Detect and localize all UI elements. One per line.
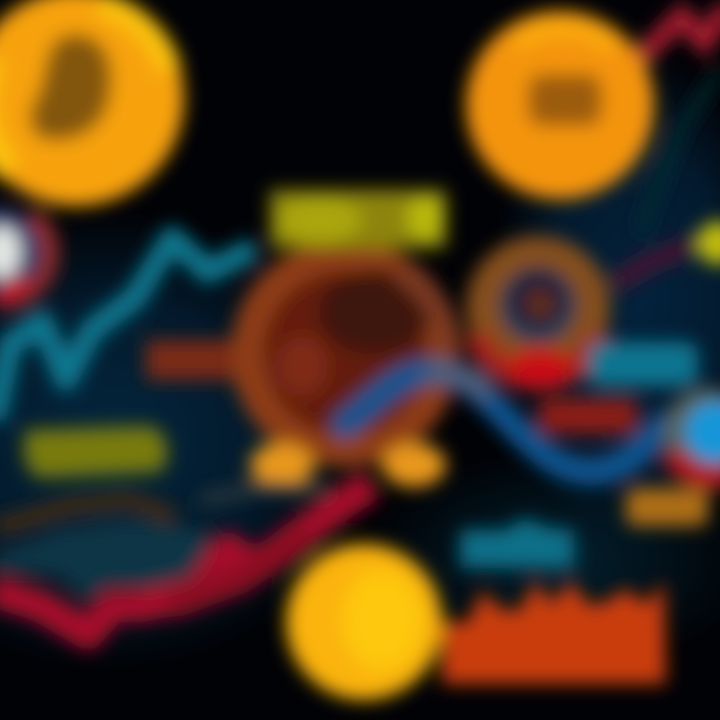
label: red text block [538, 398, 638, 434]
icon: right globe [664, 388, 720, 477]
bar chart: orange-red [442, 580, 666, 684]
label: teal block right [588, 342, 698, 386]
large ring gauge [231, 239, 459, 467]
area chart: red zigzag [0, 484, 372, 634]
coin: top right [466, 11, 654, 199]
wave line: blue [345, 371, 665, 472]
label: yellow-green heading [270, 190, 446, 248]
label: dark orange block [146, 340, 234, 380]
label: yellow dot right [698, 221, 720, 265]
coin: yellow bottom [286, 544, 442, 700]
label: teal text block [460, 518, 574, 568]
label: orange text block [626, 488, 708, 526]
feet: yellow blobs under ring [250, 443, 446, 487]
icon: left globe [0, 208, 50, 299]
line chart: dark traces right [612, 70, 720, 285]
line chart: teal [0, 238, 255, 420]
coin: top left [0, 0, 184, 206]
ring gauge: right [466, 236, 610, 388]
area chart: bottom-left traces [0, 488, 330, 600]
label: olive text block [24, 426, 167, 478]
line chart: top right red [640, 6, 720, 58]
